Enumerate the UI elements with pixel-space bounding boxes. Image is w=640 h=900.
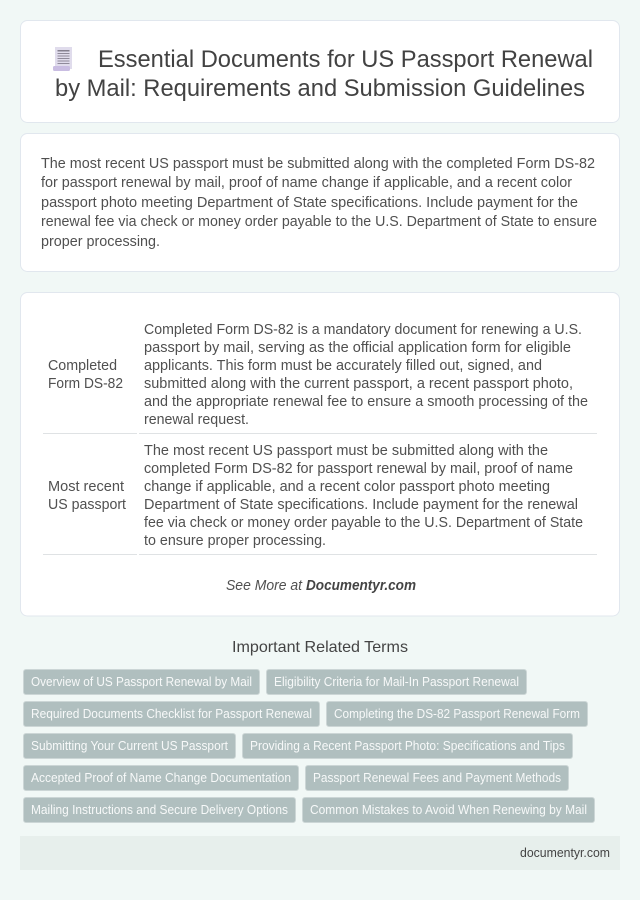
row: Completed Form DS-82: applicants. This form must be accurately filled out, signed, and — [144, 358, 542, 374]
row: Most recent US passport: change if applicable, and a recent color passport photo meeting — [144, 479, 550, 495]
see more link: See More at — [226, 578, 303, 594]
chip: Passport Renewal Fees and Payment Methods — [313, 771, 561, 785]
row: Most recent US passport: Department of State specifications. Include payment for the renewal — [144, 497, 578, 513]
summary text: proper processing. — [41, 234, 160, 250]
row: Most recent US passport — [48, 443, 583, 549]
chip — [326, 702, 588, 726]
row: Most recent US passport: fee via check or money order payable to the U.S. Department of State — [144, 515, 583, 531]
icon: document — [53, 47, 72, 71]
chip — [302, 798, 594, 822]
row: Most recent US passport: US passport — [48, 497, 126, 513]
panel: title card — [20, 20, 620, 122]
footer — [20, 836, 620, 870]
chip — [24, 734, 236, 758]
title: by Mail: Requirements and Submission Guidelines — [55, 75, 585, 102]
chip — [24, 670, 260, 694]
summary text: passport photo meeting Department of State specifications. Include payment for the — [41, 195, 578, 211]
row: Most recent US passport: completed Form DS-82 for passport renewal by mail, proof of name — [144, 461, 573, 477]
see more link — [226, 578, 416, 594]
row: Most recent US passport: The most recent US passport must be submitted along with the — [144, 443, 548, 459]
summary text — [41, 156, 597, 250]
chip: Overview of US Passport Renewal by Mail — [31, 675, 252, 689]
row: Completed Form DS-82: and the appropriate renewal fee to ensure a smooth processing of the — [144, 394, 588, 410]
title — [55, 46, 593, 102]
summary text: for passport renewal by mail, proof of name change if applicable, and a recent color — [41, 175, 572, 191]
chip — [24, 766, 298, 790]
see more link: Documentyr.com — [306, 578, 416, 594]
row: Completed Form DS-82: passport by mail, serving as the official application form for eligible — [144, 340, 571, 356]
row: Completed Form DS-82: Completed Form DS-82 is a mandatory document for renewing a U.S. — [144, 322, 582, 338]
chip: Common Mistakes to Avoid When Renewing by Mail — [310, 803, 587, 817]
chip: Mailing Instructions and Secure Delivery Options — [31, 803, 288, 817]
chip — [242, 734, 572, 758]
chip: Providing a Recent Passport Photo: Specifications and Tips — [250, 739, 565, 753]
panel: documents table — [20, 292, 620, 616]
chip — [306, 766, 568, 790]
chip — [266, 670, 526, 694]
chip — [24, 702, 320, 726]
chip: Submitting Your Current US Passport — [31, 739, 228, 753]
row: Completed Form DS-82: Completed — [48, 358, 117, 374]
row: Completed Form DS-82: renewal request. — [144, 412, 249, 428]
row: Most recent US passport: Most recent — [48, 479, 124, 495]
title: Essential Documents for US Passport Renewal — [98, 46, 593, 73]
panel: summary — [20, 134, 620, 272]
row: Completed Form DS-82: Form DS-82 — [48, 376, 123, 392]
summary text: The most recent US passport must be submitted along with the completed Form DS-82 — [41, 156, 595, 172]
chip: Completing the DS-82 Passport Renewal Form — [334, 707, 580, 721]
footer: documentyr.com — [520, 846, 610, 860]
chip — [24, 798, 296, 822]
chip: Accepted Proof of Name Change Documentation — [31, 771, 291, 785]
chip: Eligibility Criteria for Mail-In Passport Renewal — [274, 675, 519, 689]
row: Most recent US passport: to ensure proper processing. — [144, 533, 326, 549]
heading: important related terms: Important Related Terms — [232, 639, 408, 656]
summary text: renewal fee via check or money order payable to the U.S. Department of State to ensure — [41, 214, 597, 230]
chip: Required Documents Checklist for Passport Renewal — [31, 707, 312, 721]
row: Completed Form DS-82 — [48, 322, 588, 428]
row: Completed Form DS-82: submitted along with the current passport, a recent passport photo, — [144, 376, 573, 392]
related terms chips — [24, 670, 594, 822]
